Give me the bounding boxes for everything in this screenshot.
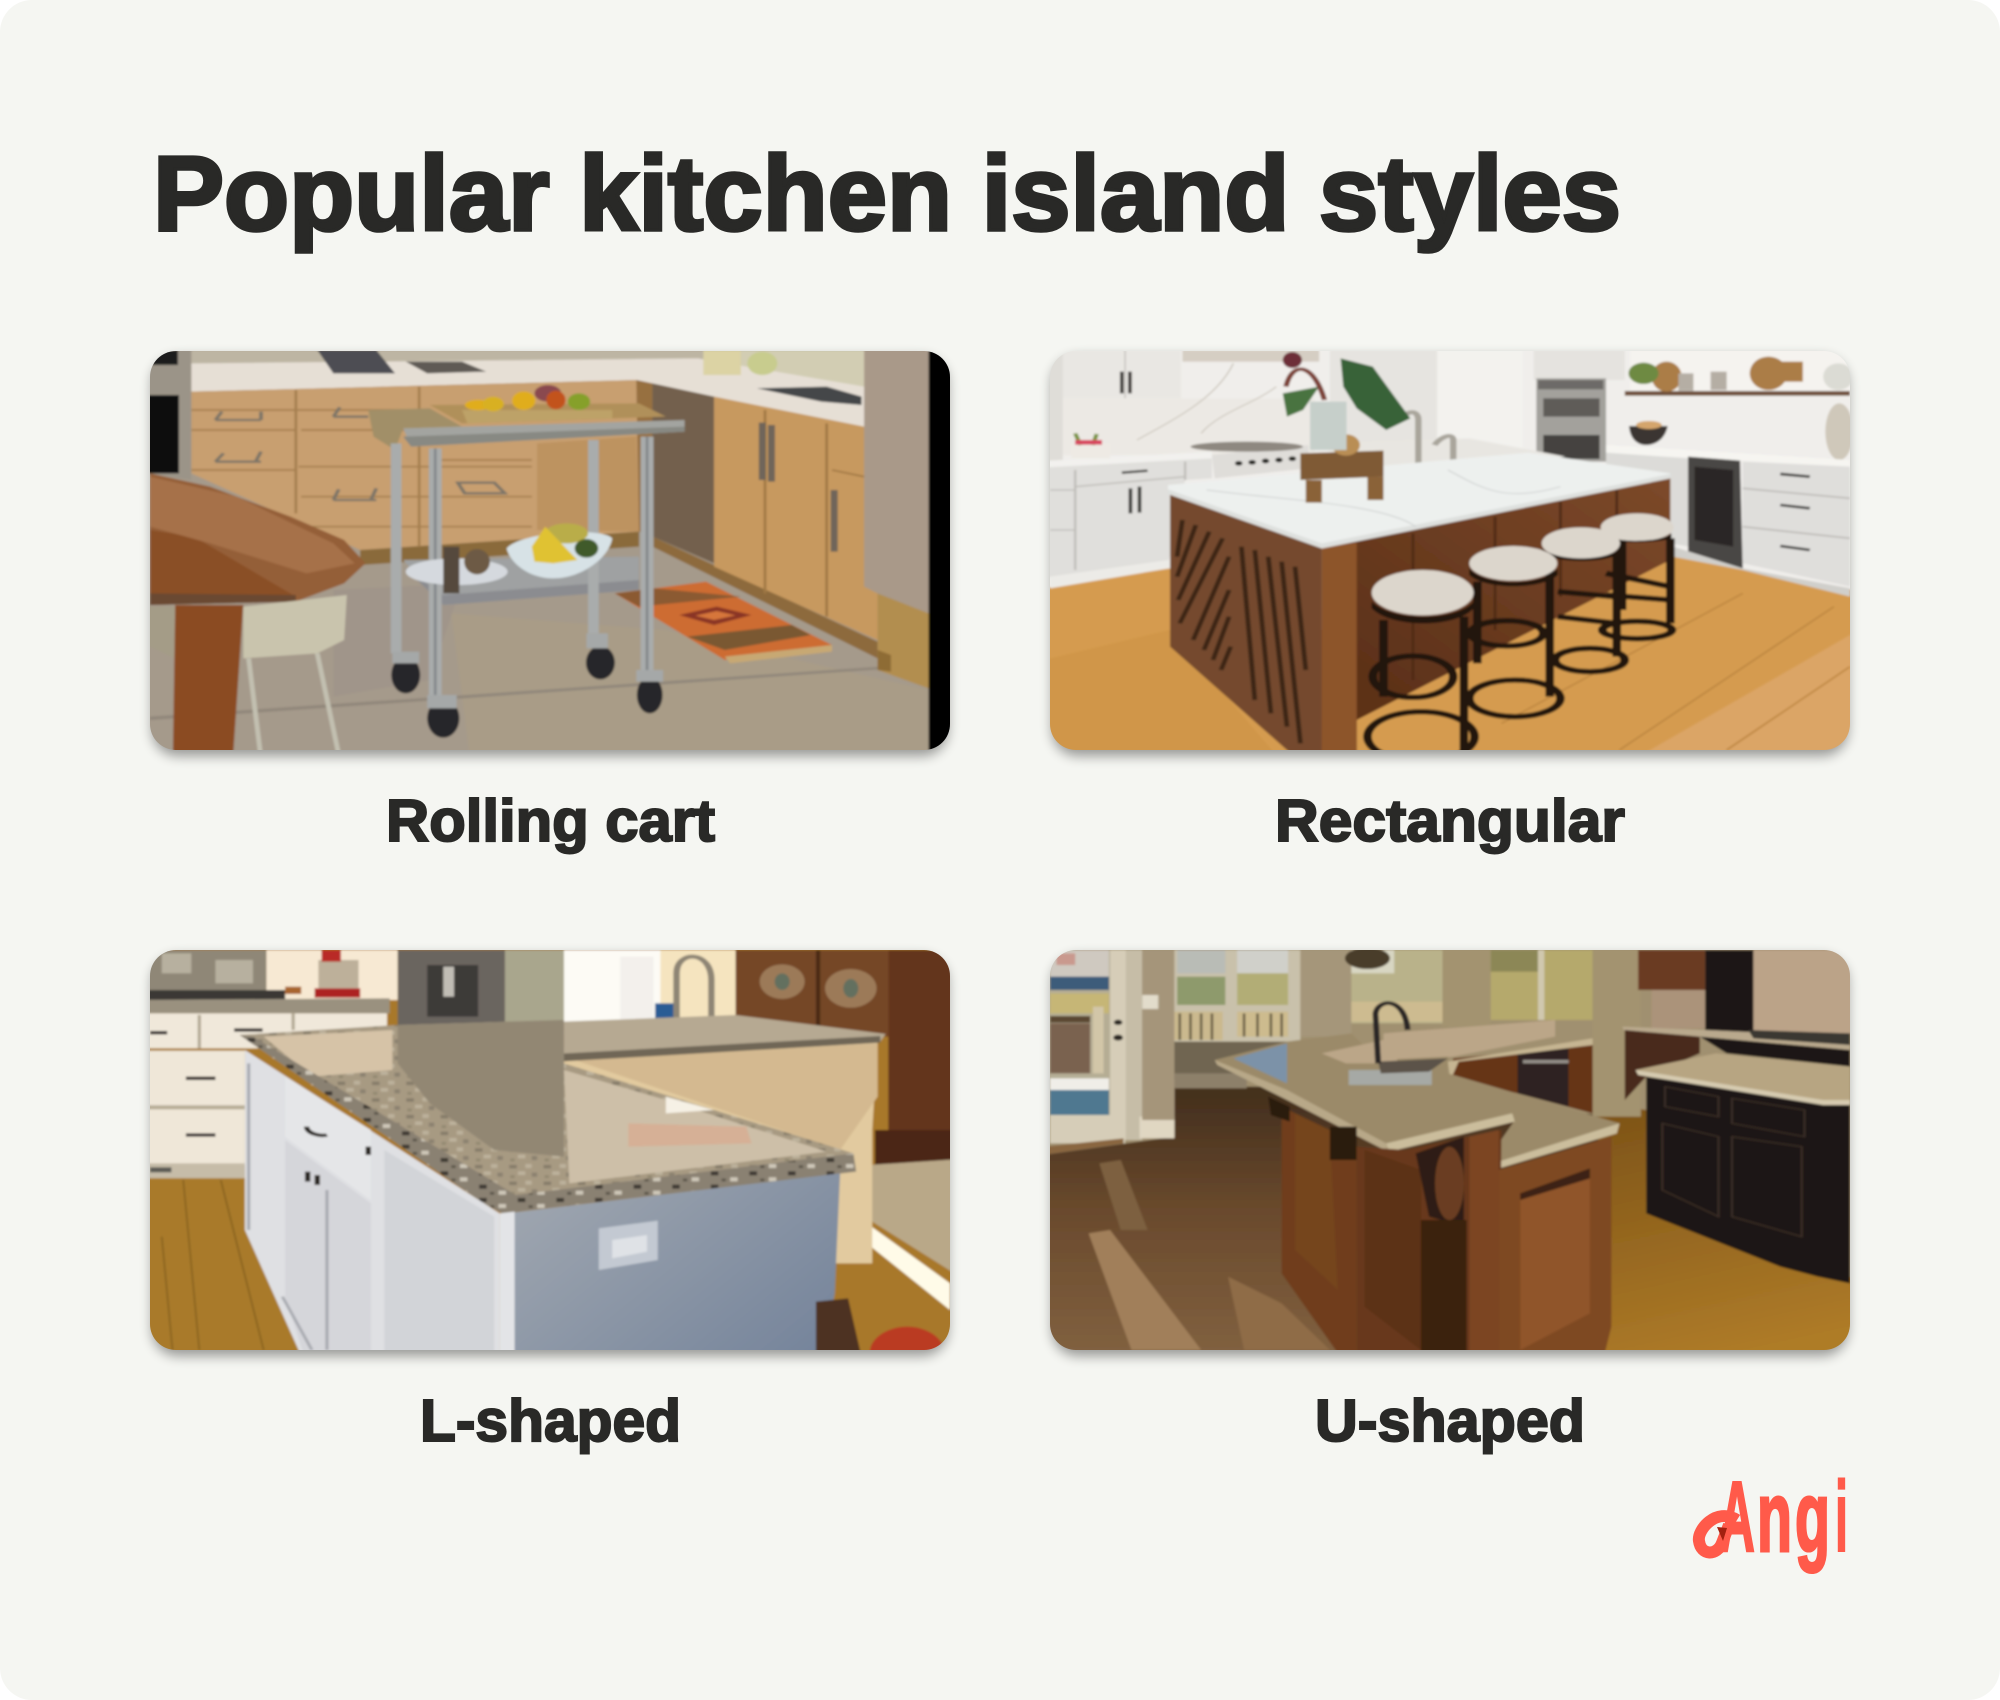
door window outdoors <box>1050 952 1110 1114</box>
logo: Angi: n <box>1757 1461 1792 1573</box>
photo: rolling cart kitchen <box>150 351 950 750</box>
logo: Angi: g <box>1795 1461 1830 1573</box>
panel: L-shaped <box>144 948 956 1364</box>
label: rectangular: Rectangular <box>1275 788 1625 854</box>
label: L-shaped: L-shaped <box>420 1388 681 1454</box>
panel: rectangular <box>1044 349 1856 764</box>
logo: Angi <box>1699 1461 1848 1573</box>
label: U-shaped: U-shaped <box>1315 1388 1585 1454</box>
text: i <box>1835 1461 1848 1573</box>
photo: L-shaped island kitchen <box>150 950 950 1350</box>
photo: U-shaped island kitchen <box>1050 950 1850 1350</box>
photo: rectangular island kitchen <box>1050 351 1850 750</box>
label: rolling cart: Rolling cart <box>386 788 715 854</box>
title: Popular kitchen island styles <box>153 135 1621 253</box>
far windows <box>1174 950 1300 1042</box>
panel: U-shaped <box>1044 948 1856 1364</box>
logo: Angi: A <box>1719 1461 1755 1573</box>
panel: rolling cart <box>144 349 956 764</box>
